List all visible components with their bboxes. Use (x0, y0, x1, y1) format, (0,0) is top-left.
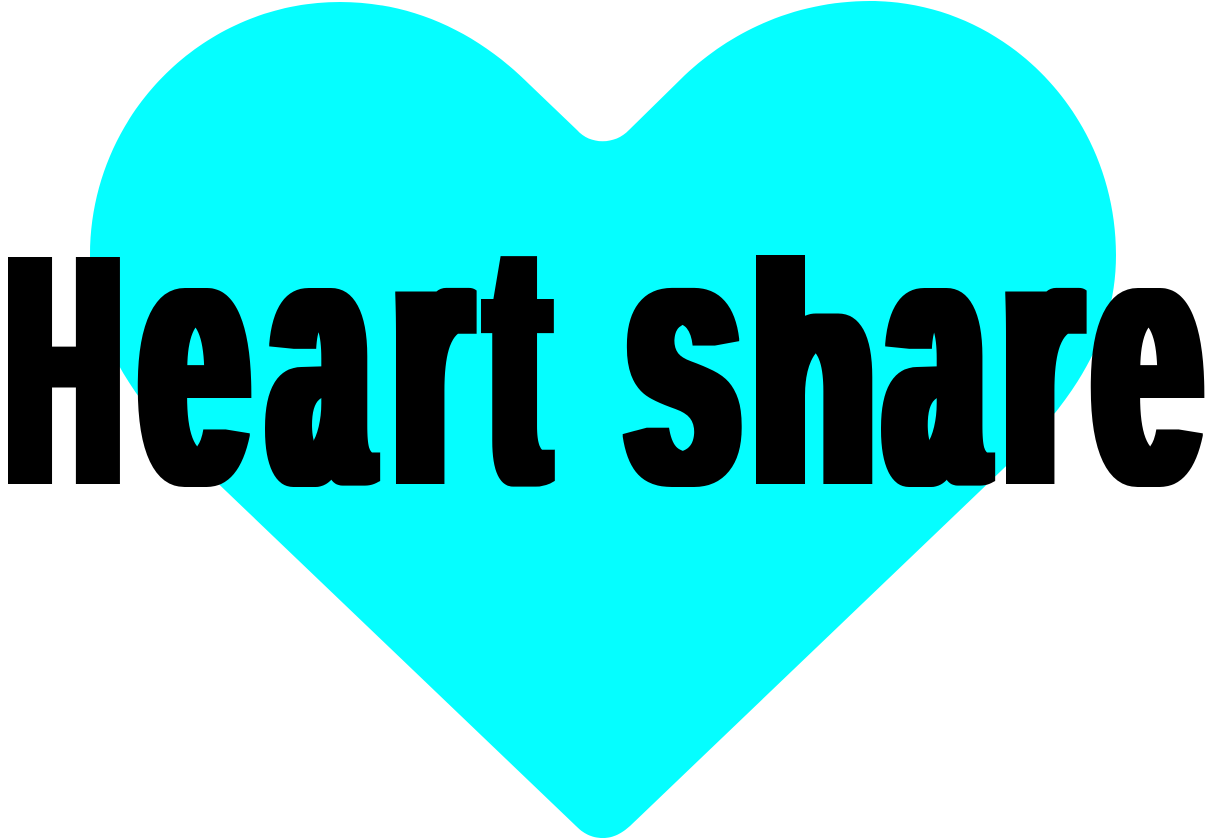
title (9, 157, 1200, 560)
title: H (9, 188, 119, 553)
title: s (627, 157, 739, 559)
title: a (887, 157, 984, 559)
title: e (141, 157, 247, 559)
title: r (1004, 157, 1079, 560)
title: r (394, 157, 469, 560)
title: e (1094, 157, 1200, 559)
title: a (271, 157, 369, 559)
title: t (490, 170, 546, 556)
title: h (753, 200, 873, 550)
